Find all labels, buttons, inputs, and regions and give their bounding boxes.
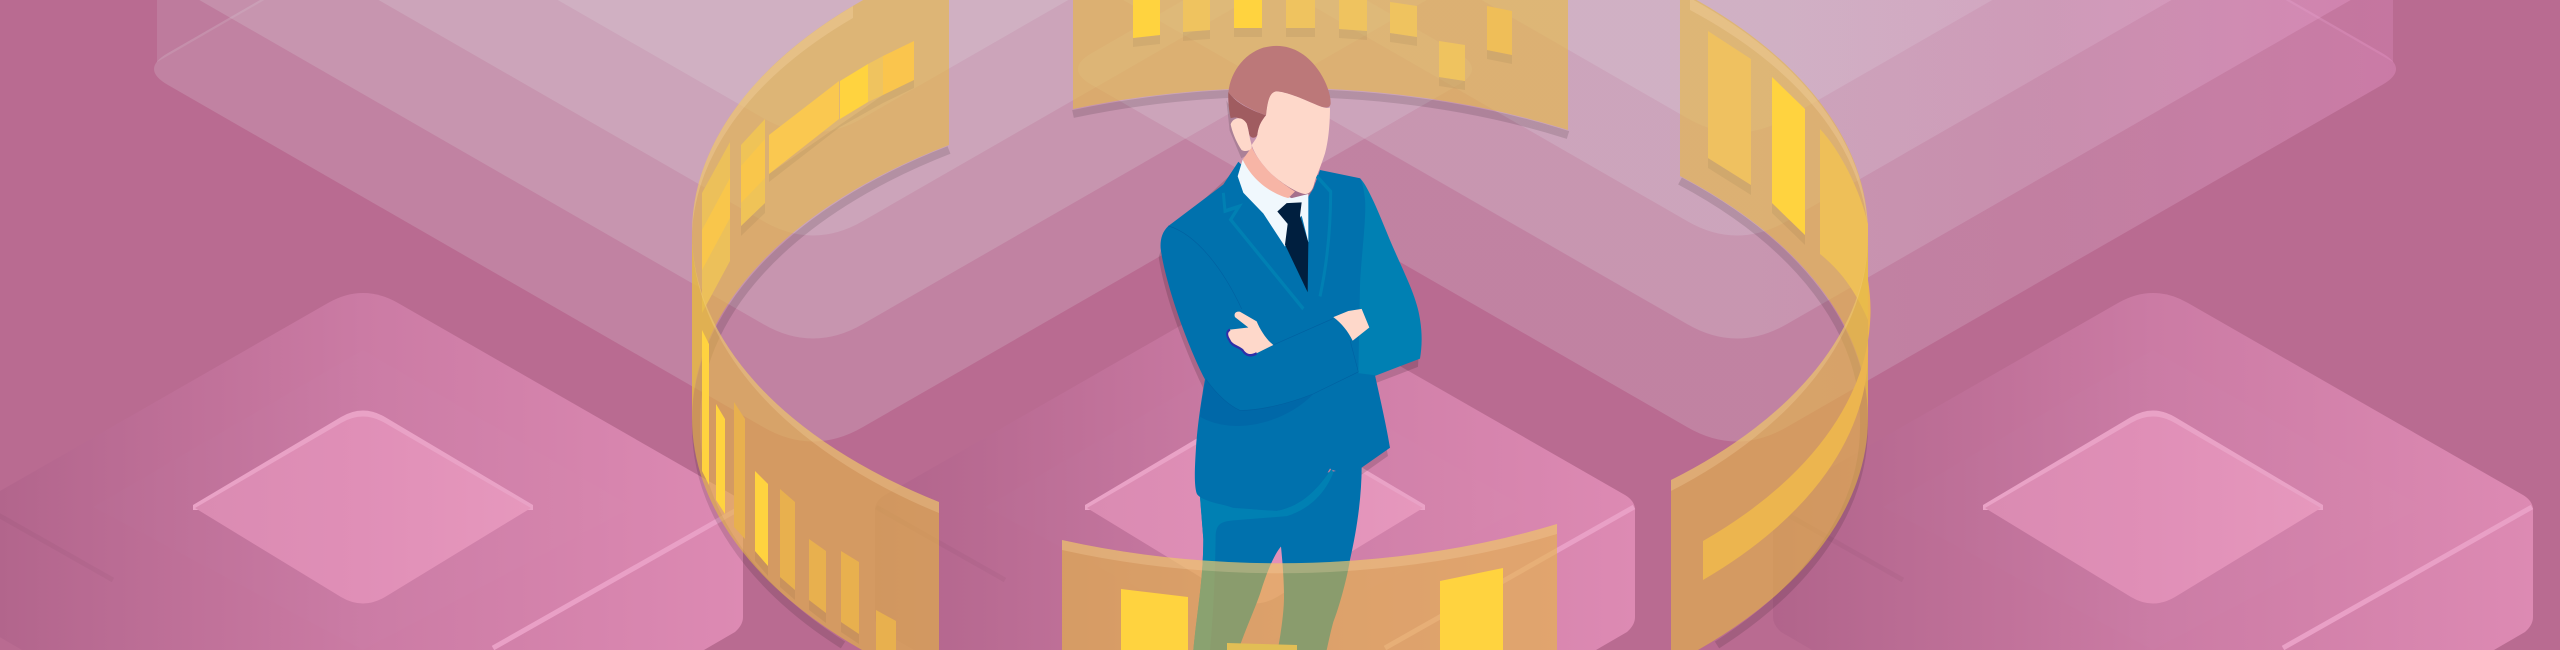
trouser highlight (1193, 468, 1333, 650)
lapels (1223, 176, 1331, 309)
jacket (1161, 162, 1390, 511)
ring back centre segment (1073, 0, 1568, 130)
ear (1231, 118, 1252, 151)
front centre windows (1121, 568, 1503, 650)
back left windows (702, 41, 914, 313)
back centre windows (1133, 0, 1512, 81)
ring shadow on floor (696, 93, 1864, 645)
ring back right segment (1680, 0, 1868, 418)
upper stack right (1078, 0, 2396, 442)
shirt (1238, 160, 1308, 247)
front ring rim highlights (692, 233, 1868, 573)
ring front centre segment (1062, 524, 1557, 650)
trousers (1193, 466, 1362, 650)
sleeve seams (1168, 226, 1358, 410)
businessman (1159, 46, 1422, 650)
ring front segments (692, 233, 1868, 650)
tie (1277, 202, 1308, 292)
back right windows (1708, 31, 1868, 320)
left hand outline (1227, 330, 1257, 355)
neck (1243, 147, 1295, 198)
ring front left segment (692, 233, 939, 650)
right hand (1333, 309, 1369, 341)
ring back left segment (692, 0, 949, 418)
right sleeve (1310, 178, 1422, 399)
back ring window shadows (741, 28, 1805, 245)
back ring rim highlights (692, 0, 1868, 233)
floor box centre (875, 293, 1635, 650)
forearm (1206, 309, 1358, 410)
front left windows (702, 330, 896, 650)
hair (1228, 46, 1331, 115)
front right window strip (1703, 280, 1870, 580)
under-arm shade (1200, 379, 1313, 426)
man shadow (1159, 100, 1420, 476)
sideburn (1228, 92, 1266, 138)
ring back segments (692, 0, 1868, 418)
front left window shadows (755, 551, 859, 644)
face (1252, 91, 1330, 194)
floor box right (1773, 293, 2533, 650)
floor box left (0, 293, 743, 650)
upper stack left (154, 0, 1472, 442)
ring front right segment (1671, 233, 1868, 650)
left hand (1227, 312, 1273, 355)
